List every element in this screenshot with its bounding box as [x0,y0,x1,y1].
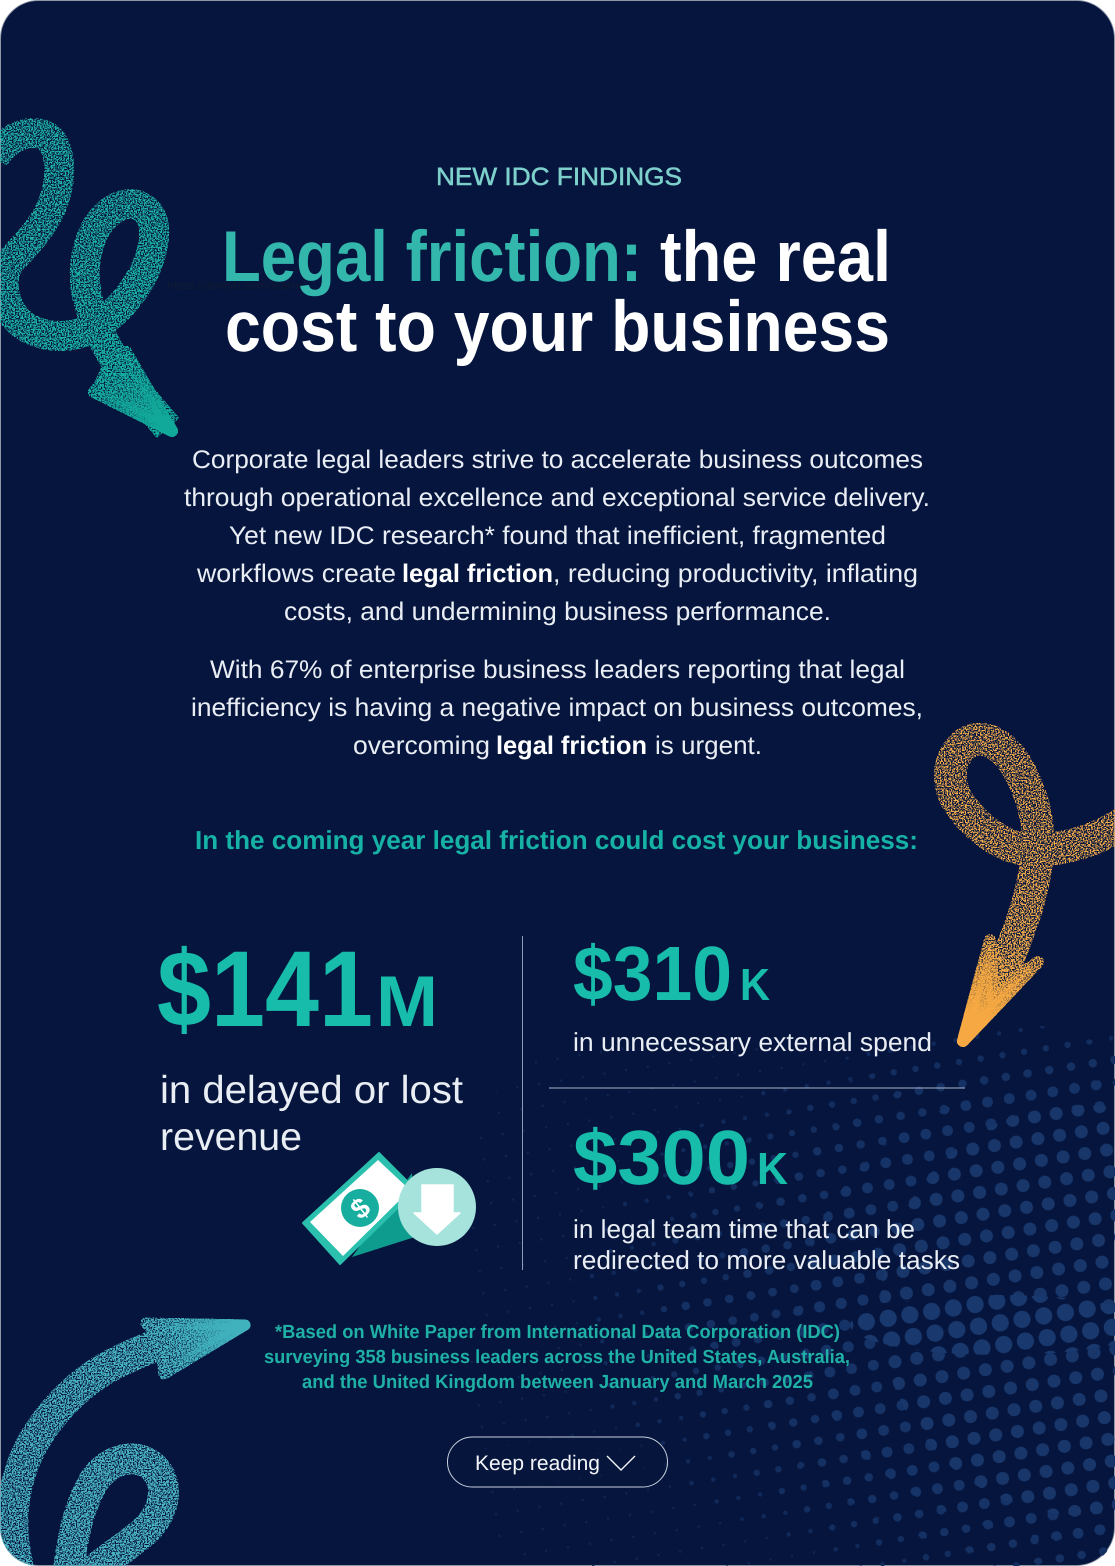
stat: $141M: $141 [157,928,373,1049]
stray link text: https://dewvb.com/learn/ [167,280,303,292]
button: keep reading [448,1437,668,1487]
footnote [264,1322,850,1393]
intro paragraph: workflows create [196,560,396,588]
stat: $141M [157,928,463,1159]
stat: $310K [573,931,932,1057]
intro paragraph: through operational excellence and exceptional service delivery. [184,484,930,512]
section heading: In the coming year legal friction could cost your business: [195,825,918,855]
button: keep reading: Keep reading [475,1452,600,1475]
stat: $300K: in legal team time that can be [573,1214,915,1244]
arrow: teal scribble, top left [0,133,172,431]
second paragraph: With 67% of enterprise business leaders reporting that legal [210,656,905,684]
title: Legal friction: [222,217,642,297]
second paragraph: is urgent. [655,732,762,760]
stat: $310K: $310 [573,931,732,1017]
arrow: blue-teal scribble, bottom left [12,1323,245,1566]
second paragraph: overcoming [353,732,490,760]
stat: $300K: K [757,1143,788,1194]
stat: $300K: $300 [573,1115,750,1201]
footnote: *Based on White Paper from International Data Corporation (IDC) [275,1322,840,1343]
arrow tip: blue-teal [146,1323,245,1374]
icon: money with down arrow [303,1153,476,1264]
footnote: and the United Kingdom between January and March 2025 [302,1372,813,1393]
title: the real [660,217,891,297]
stat: $141M: M [376,962,438,1042]
intro paragraph: , reducing productivity, inflating [553,560,918,588]
title [222,217,891,367]
halftone dot pattern [470,1025,1115,1566]
intro paragraph: costs, and undermining business performance. [284,598,831,626]
icon: money with down arrow: $ [345,1191,376,1225]
eyebrow: NEW IDC FINDINGS [436,163,682,191]
second paragraph: legal friction [496,732,647,760]
stat: $300K: redirected to more valuable tasks [573,1245,960,1275]
intro paragraph [184,446,930,626]
second paragraph [191,656,923,760]
stat: $141M: in delayed or lost [160,1069,463,1112]
arrow tip: orange [963,940,1038,1041]
stat: $300K [573,1115,960,1275]
title: cost to your business [225,287,890,367]
intro paragraph: legal friction [402,560,553,588]
icon: chevron [607,1456,635,1470]
stat: $310K: in unnecessary external spend [573,1027,932,1057]
intro paragraph: Yet new IDC research* found that inefficient, fragmented [229,522,886,550]
footnote: surveying 358 business leaders across the United States, Australia, [264,1347,850,1368]
arrow tip: teal [94,352,172,431]
stat: $141M: revenue [160,1116,302,1159]
intro paragraph: Corporate legal leaders strive to accelerate business outcomes [192,446,923,474]
stat: $310K: K [740,959,770,1010]
arrow: orange scribble, right [950,739,1115,1041]
second paragraph: inefficiency is having a negative impact on business outcomes, [191,694,923,722]
